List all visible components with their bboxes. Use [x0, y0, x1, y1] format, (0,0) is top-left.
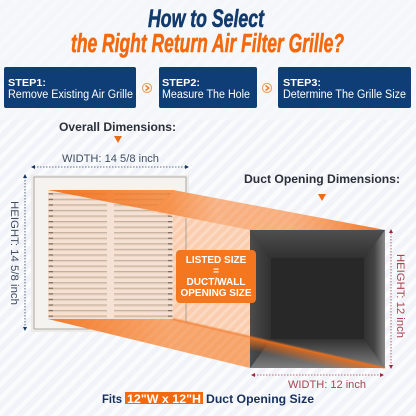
title: How to Select [148, 5, 265, 33]
arrow icon: step 2 to step 3 [262, 83, 272, 93]
grille frame seen through beam [34, 177, 186, 329]
heading: duct opening dimensions [244, 172, 400, 201]
light beam between grille and duct [173, 190, 250, 368]
step 3 box: STEP3: [283, 77, 321, 89]
return air grille [31, 175, 189, 332]
duct width dimension: WIDTH: 12 inch [288, 379, 366, 391]
top orange beam [48, 190, 385, 230]
arrow icon: step 1 to step 2 [142, 83, 152, 93]
bottom caption: Fits [102, 392, 122, 406]
duct height dimension [389, 229, 406, 369]
duct height dimension: HEIGHT: 12 inch [394, 254, 406, 338]
heading: overall dimensions [59, 120, 176, 143]
listed size callout: LISTED SIZE [186, 255, 247, 266]
step 1 box [4, 67, 136, 108]
title [71, 5, 344, 58]
bottom caption [102, 392, 314, 406]
bottom orange beam [48, 319, 385, 368]
listed size callout: = [213, 266, 219, 277]
overall height dimension [8, 174, 27, 331]
listed size callout [176, 250, 256, 303]
step 1 box: STEP1: [8, 77, 46, 89]
step 2 box: STEP2: [162, 77, 200, 89]
duct width dimension [251, 373, 384, 391]
step 3 box [278, 67, 411, 108]
heading: overall dimensions: Overall Dimensions: [59, 120, 176, 134]
step 2 box [159, 67, 257, 108]
step 3 box: Determine The Grille Size [283, 89, 406, 101]
heading: duct opening dimensions: Duct Opening Dimensions: [244, 172, 400, 186]
overall width dimension [31, 153, 189, 169]
step 2 box: Measure The Hole [162, 89, 250, 101]
step 1 box: Remove Existing Air Grille [8, 89, 133, 101]
overall height dimension: HEIGHT: 14 5/8 inch [8, 201, 20, 305]
overall width dimension: WIDTH: 14 5/8 inch [62, 153, 159, 165]
bottom caption: 12"W x 12"H [127, 392, 201, 406]
listed size callout: DUCT/WALL [187, 277, 245, 288]
listed size callout: OPENING SIZE [180, 288, 252, 299]
duct opening [250, 230, 385, 368]
bottom caption: Duct Opening Size [206, 392, 314, 406]
